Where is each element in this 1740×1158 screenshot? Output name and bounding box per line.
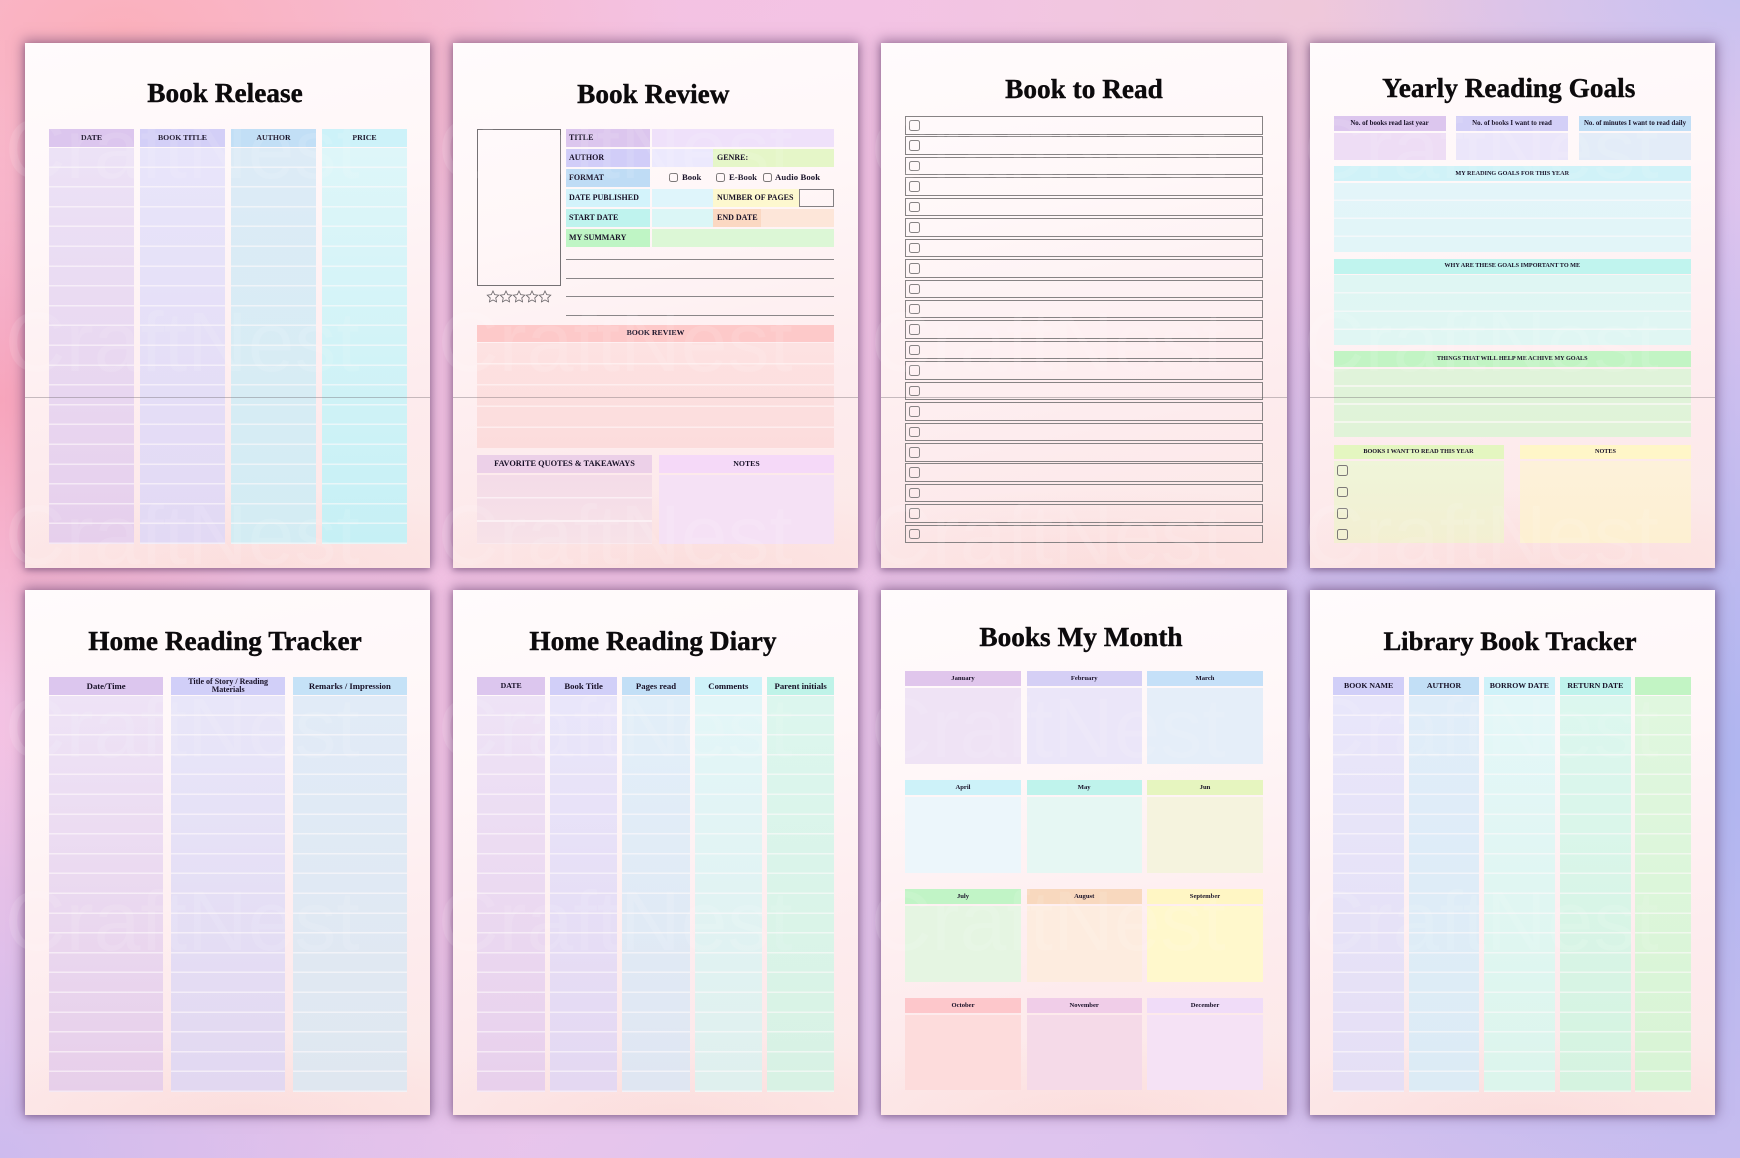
comments column rows	[695, 696, 762, 1092]
month box: September	[1147, 906, 1263, 982]
story title column rows	[171, 696, 285, 1092]
watermark overlay: CraftNest	[5, 874, 360, 968]
month header: May	[1027, 780, 1142, 795]
title: Book Review: Book Review	[577, 79, 730, 109]
section header: book review: BOOK REVIEW	[627, 328, 684, 337]
table header: comments: Comments	[708, 681, 748, 691]
month box: October	[905, 1015, 1021, 1090]
table header: date: DATE	[81, 133, 102, 142]
section header: books to read this year: BOOKS I WANT TO READ THIS YEAR	[1363, 448, 1474, 455]
table header: book title	[550, 677, 617, 695]
watermark overlay: CraftNest	[438, 681, 793, 775]
table header: book title: Book Title	[564, 681, 603, 691]
field: date published label: DATE PUBLISHED	[569, 193, 639, 202]
table header: story title	[171, 677, 285, 695]
table header: parent initials: Parent initials	[775, 681, 827, 691]
month header: December	[1147, 998, 1263, 1013]
stat header: minutes to read daily: No. of minutes I want to read daily	[1584, 120, 1686, 127]
book title column rows	[140, 148, 225, 544]
table header: story title: Title of Story / Reading Materials	[188, 677, 268, 694]
month header: Jun	[1147, 780, 1263, 795]
stat header: minutes to read daily	[1579, 116, 1691, 130]
section header: why goals matter	[1334, 259, 1691, 274]
format option: e-book: E-Book	[729, 172, 757, 182]
section header: books to read this year	[1334, 445, 1504, 459]
table header: author	[1409, 677, 1479, 695]
table header: remarks	[293, 677, 407, 695]
panel: Book Review page	[453, 43, 858, 568]
field: start date label: START DATE	[569, 213, 618, 222]
watermark overlay: CraftNest	[1304, 681, 1659, 775]
table header: author: AUTHOR	[1427, 681, 1461, 690]
month box: March	[1147, 688, 1263, 764]
stat header: books want to read	[1456, 116, 1568, 130]
borrow date column rows	[1484, 696, 1555, 1092]
month header: December: December	[1191, 1002, 1219, 1009]
watermark overlay: CraftNest	[438, 874, 793, 968]
reading goals rows	[1334, 183, 1691, 252]
field: summary label	[566, 229, 650, 247]
field: title label	[566, 129, 650, 147]
section header: why goals matter: WHY ARE THESE GOALS IMPORTANT TO ME	[1444, 262, 1580, 269]
date column rows	[477, 696, 545, 1092]
format option: book: Book	[682, 172, 701, 182]
section header: things that help	[1334, 351, 1691, 367]
format option: audio book: Audio Book	[775, 172, 820, 182]
month header: September	[1147, 889, 1263, 904]
month header: January: January	[951, 675, 975, 682]
quotes rows	[477, 475, 652, 544]
icon: five star rating	[486, 290, 552, 302]
panel: Book Release page	[25, 43, 430, 568]
title: Yearly Reading Goals: Yearly Reading Goals	[1382, 73, 1635, 103]
field: title label: TITLE	[569, 133, 593, 142]
watermark overlay: CraftNest	[5, 295, 360, 389]
watermark overlay: CraftNest	[1304, 102, 1659, 196]
book cover box	[477, 129, 561, 286]
section header: notes: NOTES	[1595, 448, 1616, 455]
parent initials column rows	[767, 696, 834, 1092]
book title column rows	[550, 696, 617, 1092]
month header: October	[905, 998, 1021, 1013]
stat header: books read last year: No. of books read last year	[1350, 120, 1429, 127]
section header: notes	[659, 455, 834, 473]
field: author label	[566, 149, 650, 167]
checklist rows	[905, 116, 1263, 543]
section header: notes	[1520, 445, 1691, 459]
checkbox 2	[1337, 486, 1348, 497]
month header: October: October	[951, 1002, 975, 1009]
table header: pages read	[622, 677, 690, 695]
stat box: books want to read	[1456, 133, 1568, 160]
checkbox 1	[1337, 465, 1348, 476]
watermark overlay: CraftNest	[871, 295, 1226, 389]
month header: September: September	[1190, 893, 1220, 900]
table header: date: DATE	[501, 681, 522, 690]
table header: date	[49, 129, 134, 147]
month header: August	[1027, 889, 1142, 904]
month header: March	[1147, 671, 1263, 686]
table header: author: AUTHOR	[256, 133, 291, 142]
checkbox: book	[669, 173, 678, 182]
month header: March: March	[1196, 675, 1214, 682]
table header: book name: BOOK NAME	[1344, 681, 1393, 690]
title: Books My Month: Books My Month	[979, 622, 1183, 652]
month header: July: July	[957, 893, 969, 900]
month header: January	[905, 671, 1021, 686]
stat header: books want to read: No. of books I want to read	[1472, 120, 1552, 127]
book name column rows	[1333, 696, 1404, 1092]
month header: May: May	[1078, 784, 1091, 791]
section header: favorite quotes and takeaways: FAVORITE QUOTES & TAKEAWAYS	[494, 459, 635, 468]
table header: book title: BOOK TITLE	[158, 133, 207, 142]
author column rows	[1409, 696, 1479, 1092]
watermark overlay: CraftNest	[871, 874, 1226, 968]
field: date published label	[566, 189, 650, 207]
stat header: books read last year	[1334, 116, 1446, 130]
watermark overlay: CraftNest	[1304, 874, 1659, 968]
table header: borrow date	[1484, 677, 1555, 695]
section header: reading goals	[1334, 166, 1691, 181]
month header: February: February	[1071, 675, 1098, 682]
month box: May	[1027, 797, 1142, 873]
table header: parent initials	[767, 677, 834, 695]
month box: April	[905, 797, 1021, 873]
section header: reading goals: MY READING GOALS FOR THIS YEAR	[1455, 170, 1569, 177]
checkbox: audio book	[763, 173, 772, 182]
watermark overlay: CraftNest	[438, 488, 793, 582]
date column rows	[49, 148, 134, 544]
month header: Jun: Jun	[1200, 784, 1210, 791]
field: start date label	[566, 209, 650, 227]
watermark overlay: CraftNest	[1304, 295, 1659, 389]
watermark overlay: CraftNest	[1304, 488, 1659, 582]
checkbox: e-book	[716, 173, 725, 182]
field: start date value	[652, 209, 713, 227]
section header: things that help: THINGS THAT WILL HELP ME ACHIVE MY GOALS	[1437, 355, 1588, 362]
field: summary value	[652, 229, 834, 247]
title: Book to Read: Book to Read	[1005, 74, 1163, 104]
field: number of pages box	[799, 189, 834, 207]
blank green column rows	[1635, 696, 1691, 1092]
date column rows	[49, 696, 163, 1092]
return date column rows	[1560, 696, 1631, 1092]
table header: book name	[1333, 677, 1404, 695]
book review rows	[477, 343, 834, 449]
month box: August	[1027, 906, 1142, 982]
section header: book review	[477, 325, 834, 342]
section header: notes: NOTES	[733, 459, 760, 468]
pages read column rows	[622, 696, 690, 1092]
table header: remarks: Remarks / Impression	[309, 681, 391, 691]
watermark overlay: CraftNest	[5, 488, 360, 582]
month box: December	[1147, 1015, 1263, 1090]
panel: Yearly Reading Goals page	[1310, 43, 1715, 568]
watermark overlay: CraftNest	[5, 102, 360, 196]
panel: Home Reading Tracker page	[25, 590, 430, 1115]
table header: borrow date: BORROW DATE	[1490, 681, 1549, 690]
panel: Book to Read page	[881, 43, 1287, 568]
books to read area	[1334, 461, 1504, 543]
notes area	[1520, 461, 1691, 543]
field: summary label: MY SUMMARY	[569, 233, 626, 242]
month header: November: November	[1070, 1002, 1099, 1009]
field: author value	[652, 149, 713, 167]
notes area	[659, 475, 834, 544]
month box: January	[905, 688, 1021, 764]
field: format label	[566, 169, 650, 187]
field: number of pages label	[713, 189, 799, 207]
month header: April: April	[955, 784, 970, 791]
things that help rows	[1334, 369, 1691, 437]
field: end date label	[713, 209, 761, 227]
title: Home Reading Tracker: Home Reading Tracker	[88, 626, 362, 656]
table header: author	[231, 129, 316, 147]
field: format label: FORMAT	[569, 173, 604, 182]
panel: Home Reading Diary page	[453, 590, 858, 1115]
remarks column rows	[293, 696, 407, 1092]
month box: February	[1027, 688, 1142, 764]
checkbox 3	[1337, 508, 1348, 518]
watermark overlay: CraftNest	[871, 488, 1226, 582]
month header: August: August	[1074, 893, 1094, 900]
watermark overlay: CraftNest	[438, 102, 793, 196]
watermark overlay: CraftNest	[438, 295, 793, 389]
table header: blank green	[1635, 677, 1691, 695]
stat box: books read last year	[1334, 133, 1446, 160]
table header: comments	[695, 677, 762, 695]
field: author label: AUTHOR	[569, 153, 604, 162]
field: genre: GENRE:	[717, 153, 748, 162]
title: Library Book Tracker: Library Book Tracker	[1383, 626, 1637, 656]
field: end date value	[761, 209, 834, 227]
field: end date label: END DATE	[717, 213, 758, 222]
title: Book Release: Book Release	[147, 78, 303, 108]
table header: price	[322, 129, 407, 147]
field: title value	[652, 129, 834, 147]
month box: July	[905, 906, 1021, 982]
price column rows	[322, 148, 407, 544]
table header: date	[477, 677, 545, 695]
month box: Jun	[1147, 797, 1263, 873]
table header: date and time: Date/Time	[87, 681, 126, 691]
why goals matter rows	[1334, 275, 1691, 345]
month header: April	[905, 780, 1021, 795]
checkbox 4	[1337, 529, 1348, 540]
watermark overlay: CraftNest	[5, 681, 360, 775]
field: number of pages label: NUMBER OF PAGES	[717, 193, 793, 202]
table header: pages read: Pages read	[636, 681, 676, 691]
field: date published value	[652, 189, 713, 207]
month header: July	[905, 889, 1021, 904]
field: genre	[713, 149, 834, 167]
section header: favorite quotes and takeaways	[477, 455, 652, 473]
watermark overlay: CraftNest	[871, 102, 1226, 196]
title: Home Reading Diary: Home Reading Diary	[529, 626, 777, 656]
author column rows	[231, 148, 316, 544]
table header: return date: RETURN DATE	[1567, 681, 1623, 690]
month header: November	[1027, 998, 1142, 1013]
panel: Library Book Tracker page	[1310, 590, 1715, 1115]
table header: date and time	[49, 677, 163, 695]
table header: price: PRICE	[352, 133, 377, 142]
table header: book title	[140, 129, 225, 147]
month box: November	[1027, 1015, 1142, 1090]
panel: Books My Month page	[881, 590, 1287, 1115]
watermark overlay: CraftNest	[871, 681, 1226, 775]
table header: return date	[1560, 677, 1631, 695]
month header: February	[1027, 671, 1142, 686]
stat box: minutes to read daily	[1579, 133, 1691, 160]
